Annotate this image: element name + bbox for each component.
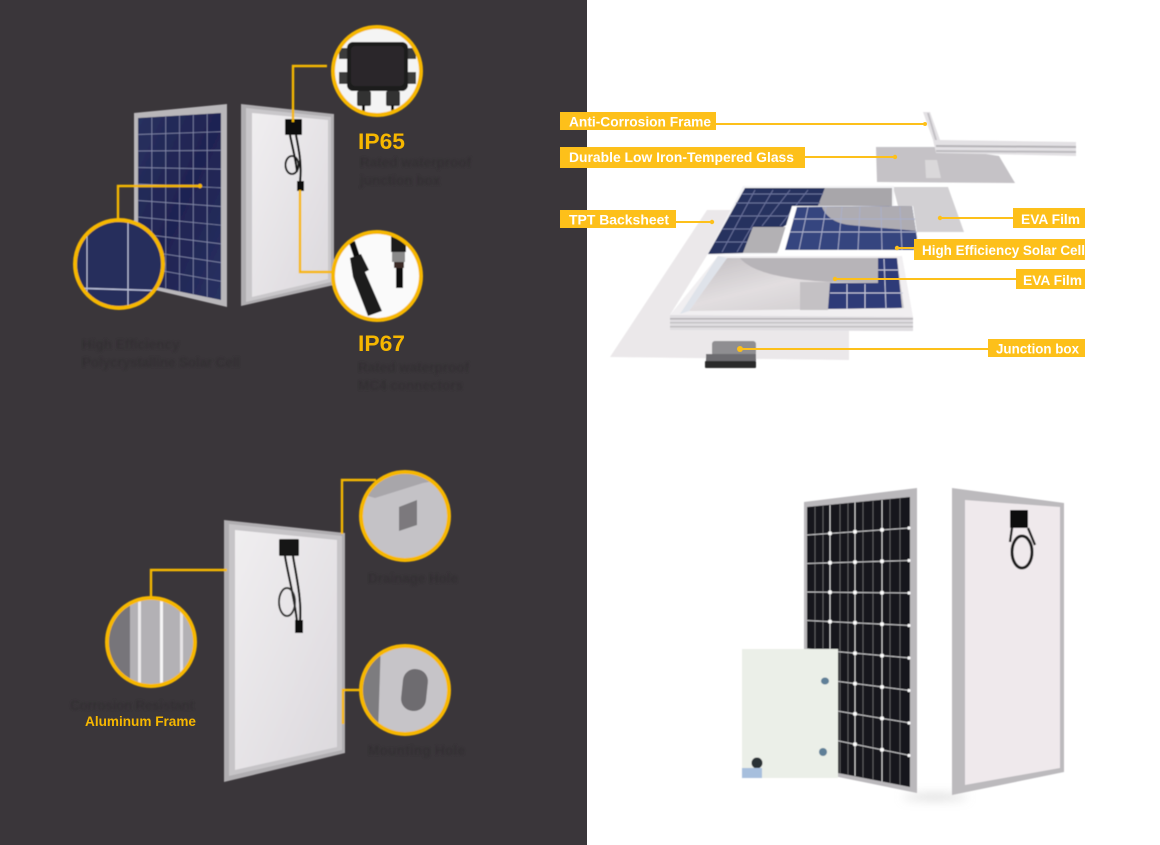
panel: aluminum frame details — [105, 472, 450, 782]
text: solar cell description: Polycrystalline Solar Cell — [82, 355, 240, 370]
leader lines for layer labels — [676, 124, 1016, 349]
layer: EVA film top — [893, 187, 964, 232]
text: mounting hole: Mounting Hole — [368, 743, 465, 758]
label: EVA Film upper — [1013, 208, 1085, 228]
leader lines — [151, 480, 376, 724]
text: corrosion resistant: Corrosion Resistant — [70, 698, 194, 713]
callout circle: solar cell close-up — [70, 215, 170, 310]
text: IP65 description: junction box — [359, 173, 441, 188]
leader lines — [118, 66, 332, 272]
solar panel front, polycrystalline — [134, 104, 227, 307]
label: TPT Backsheet: TPT Backsheet — [569, 212, 669, 228]
text: IP65 description: Rated waterproof — [360, 155, 472, 170]
label: EVA Film lower: EVA Film — [1023, 272, 1082, 288]
heading: IP67: IP67 — [358, 331, 405, 356]
callout circle: drainage hole — [361, 472, 450, 560]
solar panel back view — [224, 520, 345, 782]
layer: solar cell sheet — [707, 186, 894, 255]
solar panel front, monocrystalline — [804, 488, 917, 793]
label: Anti-Corrosion Frame: Anti-Corrosion Frame — [569, 114, 711, 130]
layer: tempered glass — [876, 147, 1015, 183]
panel: exploded view of module layers — [610, 112, 1076, 368]
heading: IP65: IP65 — [358, 129, 405, 154]
leader dots — [710, 122, 942, 352]
text: aluminum frame highlight: Aluminum Frame — [85, 713, 196, 729]
accessory box — [742, 649, 838, 778]
text: drainage hole: Drainage Hole — [368, 571, 458, 586]
text: IP67 description: Rated waterproof — [358, 360, 470, 375]
panel: monocrystalline panels and box — [742, 488, 1064, 799]
layer: module frame with EVA film — [670, 256, 913, 331]
solar panel back — [952, 488, 1064, 795]
ground shadow — [903, 795, 967, 799]
panel: polycrystalline panels and IP ratings — [70, 27, 421, 320]
text: solar cell description: High Efficiency — [82, 337, 180, 352]
layer: anti-corrosion frame corner — [923, 112, 1076, 156]
layer: TPT backsheet — [610, 210, 849, 360]
label: EVA Film lower — [1016, 269, 1085, 289]
leader dot — [198, 184, 202, 188]
callout circle: junction box — [333, 27, 421, 117]
solar panel back with junction box — [241, 104, 334, 306]
label: Durable Low Iron-Tempered Glass: Durable Low Iron-Tempered Glass — [569, 149, 794, 165]
panel: dark left background — [0, 0, 587, 845]
label: High Efficiency Solar Cell: High Efficiency Solar Cell — [922, 242, 1085, 258]
text: IP67 description: MC4 connectors — [358, 378, 463, 393]
callout circle: MC4 connector — [333, 232, 421, 320]
label: Junction box: Junction box — [996, 340, 1079, 356]
callout circle: aluminum frame profile — [105, 595, 195, 690]
label: EVA Film upper: EVA Film — [1021, 211, 1080, 227]
callout circle: mounting hole — [360, 640, 449, 735]
layer: high efficiency solar cell — [777, 206, 918, 255]
layer: junction box — [705, 341, 756, 368]
